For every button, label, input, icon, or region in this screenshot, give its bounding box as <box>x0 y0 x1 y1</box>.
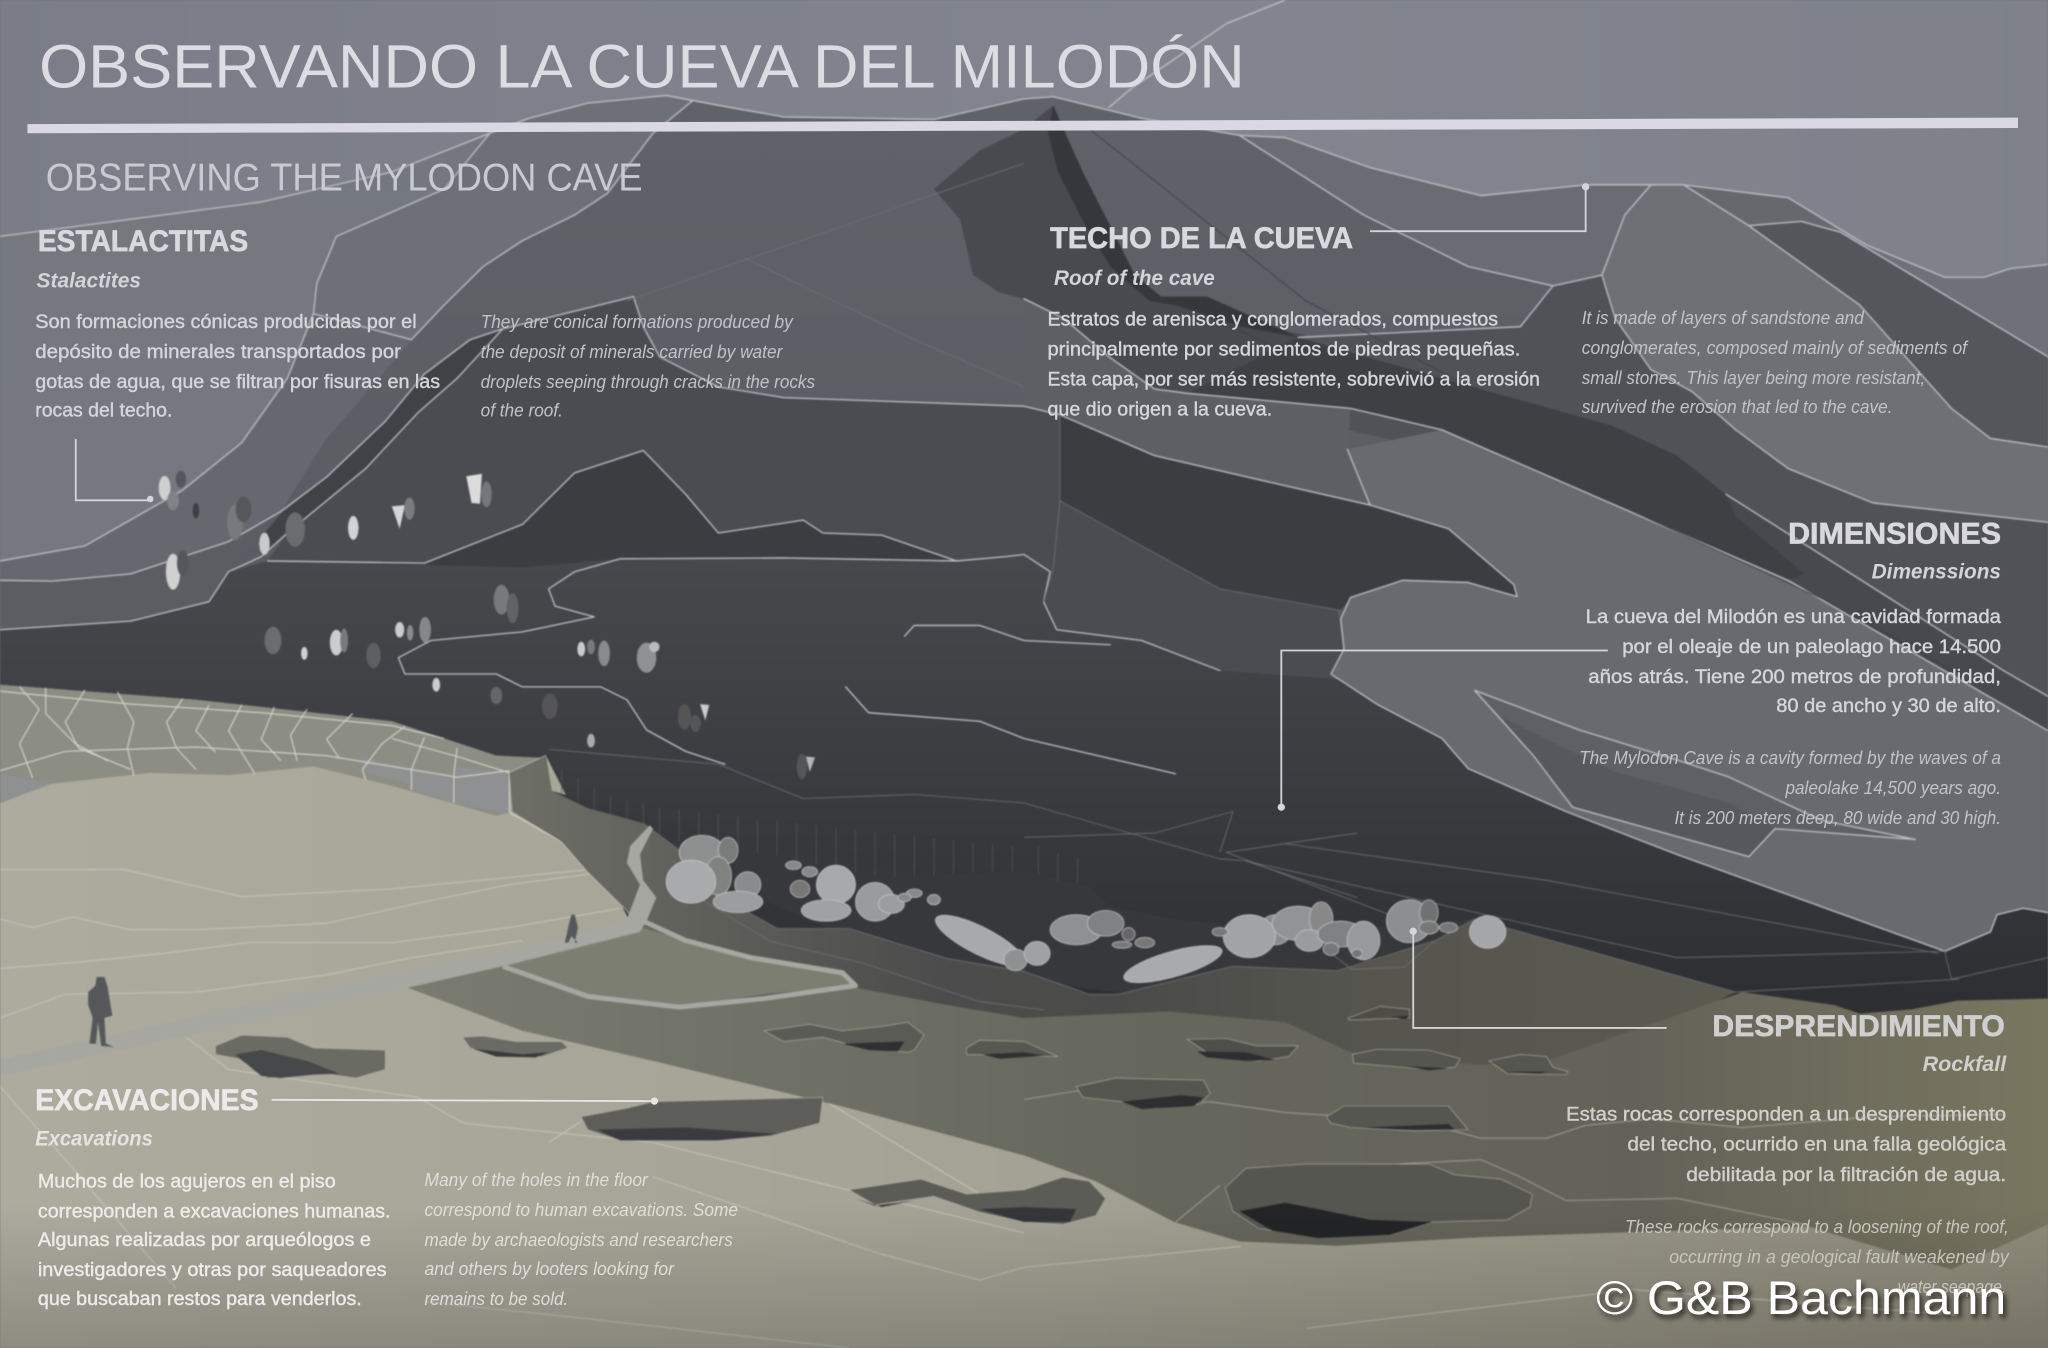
contour lines on olive band <box>1024 1091 2004 1225</box>
subheading: roof: Roof of the cave <box>1054 267 1215 290</box>
body: english: of the roof. <box>481 400 563 421</box>
person: large walker <box>88 977 114 1047</box>
title rule <box>27 118 2018 133</box>
excavation holes <box>216 1006 1568 1238</box>
body: english: paleolake 14,500 years ago. <box>1785 777 2001 798</box>
body: spanish: años atrás. Tiene 200 metros de profundidad, <box>1588 666 2001 688</box>
body: english: remains to be sold. <box>424 1288 568 1309</box>
body: english <box>424 1169 738 1309</box>
panel: techo de la cueva <box>1048 222 1969 420</box>
body: spanish: debilitada por la filtración de agua. <box>1686 1164 2006 1186</box>
light wedge: cave wall <box>1331 430 2048 951</box>
body: english: made by archaeologists and researchers <box>424 1229 733 1250</box>
body: spanish: por el oleaje de un paleolago hace 14.500 <box>1622 636 2001 658</box>
stratum: upper right small <box>1684 185 1840 232</box>
body: spanish: principalmente por sedimentos de piedras pequeñas. <box>1048 338 1520 360</box>
stratum: lane above tongue <box>1024 301 1370 505</box>
stratum: right dark band <box>1749 221 2048 447</box>
callout: stalactites leader <box>76 439 153 502</box>
rock stratum: left upper <box>313 95 692 340</box>
body: english <box>1579 747 2001 828</box>
floor: sand base <box>0 685 2048 1348</box>
body: spanish: Estas rocas corresponden a un desprendimiento <box>1566 1104 2006 1126</box>
panel: excavaciones <box>35 1084 738 1310</box>
body: spanish: Esta capa, por ser más resistente, sobrevivió a la erosión <box>1048 368 1540 390</box>
heading: excavaciones: EXCAVACIONES <box>35 1084 259 1117</box>
body: english <box>481 311 815 421</box>
floor: grey cracked blocks <box>0 757 509 814</box>
body: spanish <box>38 1170 391 1310</box>
rock-layer contour lines <box>643 823 1959 1010</box>
body: english: water seepage. <box>1898 1276 2006 1297</box>
body: spanish: depósito de minerales transportados por <box>35 341 401 363</box>
dark lower tongue <box>1060 415 1517 610</box>
body: spanish: que buscaban restos para venderlos. <box>38 1288 362 1310</box>
body: english: the deposit of minerals carried by water <box>481 341 783 362</box>
floor: lawn inside path loop <box>503 928 856 1007</box>
body: english: droplets seeping through cracks in the rocks <box>481 371 815 392</box>
floor: cracks network <box>0 687 637 928</box>
panel: estalactitas <box>35 225 815 422</box>
body: english: It is 200 meters deep, 80 wide and 30 high. <box>1674 807 2001 828</box>
heading: techo: TECHO DE LA CUEVA <box>1050 222 1353 255</box>
body: english: These rocks correspond to a loosening of the roof, <box>1625 1216 2009 1237</box>
mountain peak dark mass <box>934 105 1306 393</box>
body: english <box>1582 307 1969 417</box>
roof contour lines <box>0 0 2048 979</box>
body: spanish: Estratos de arenisca y conglomerados, compuestos <box>1048 308 1498 330</box>
heading: dimensiones: DIMENSIONES <box>1788 517 2001 550</box>
lower ground shading <box>0 1204 2048 1348</box>
peak dark stripe <box>1048 105 1298 337</box>
stratum: mid-dark roof layer <box>1187 275 2048 774</box>
title: OBSERVANDO LA CUEVA DEL MILODÓN <box>39 33 1245 102</box>
body: english: Many of the holes in the floor <box>424 1169 649 1190</box>
body: spanish <box>1586 606 2001 717</box>
callout: rockfall leader <box>1410 928 1667 1028</box>
subheading: rockfall: Rockfall <box>1923 1053 2007 1076</box>
rock stratum: left lower <box>0 512 281 630</box>
shaded strip beside wedge <box>1726 494 2048 731</box>
subheading: stalactites: Stalactites <box>37 269 141 292</box>
body: english: small stones. This layer being more resistant, <box>1582 367 1925 388</box>
body: spanish <box>1566 1104 2006 1186</box>
rock stratum: left middle <box>0 314 411 581</box>
body: spanish: Algunas realizadas por arqueólogos e <box>38 1229 371 1251</box>
stratum: roof mid layer <box>0 297 1344 731</box>
body: english: It is made of layers of sandstone and <box>1582 307 1865 328</box>
person: small walker <box>565 915 578 943</box>
dark cavern ceiling <box>0 550 2048 1348</box>
body: english: The Mylodon Cave is a cavity formed by the waves of a <box>1579 747 2001 768</box>
photo credit watermark: © G&B Bachmann <box>1596 1271 2006 1324</box>
callout: roof leader <box>1370 183 1589 231</box>
subheading: excavations: Excavations <box>35 1128 153 1151</box>
body: spanish: rocas del techo. <box>35 400 172 422</box>
stratum: upper right peak <box>1602 185 2048 522</box>
body: spanish: del techo, ocurrido en una falla geológica <box>1627 1134 2006 1156</box>
body: spanish: Muchos de los agujeros en el piso <box>38 1170 336 1192</box>
subtitle: OBSERVING THE MYLODON CAVE <box>46 157 643 200</box>
walkway side loop <box>503 921 856 1007</box>
body: spanish: La cueva del Milodón es una cavidad formada <box>1586 606 2001 628</box>
walkway <box>0 825 656 1076</box>
body: spanish: Son formaciones cónicas producidas por el <box>35 311 417 333</box>
body: spanish: corresponden a excavaciones humanas. <box>38 1200 391 1222</box>
body: english: They are conical formations produced by <box>481 311 795 332</box>
rocks: rockfall boulders <box>666 835 1506 990</box>
stratum: far right <box>1788 198 2048 357</box>
callout: excavations leader <box>272 1097 658 1105</box>
body: spanish: investigadores y otras por saqueadores <box>38 1259 387 1281</box>
body: spanish: 80 de ancho y 30 de alto. <box>1776 695 2001 717</box>
body: spanish <box>1048 308 1540 420</box>
subheading: dimensions: Dimenssions <box>1872 561 2001 584</box>
floor: contour lines on sand <box>0 870 1959 1348</box>
floor: cracked olive band <box>0 685 546 816</box>
floor: dark strata below ceiling <box>546 756 1736 1032</box>
stratum right of peak <box>1240 135 1651 286</box>
dark hill in ceiling <box>268 450 957 567</box>
dark tongue of sandstone <box>1187 337 1804 584</box>
heading: desprendimiento: DESPRENDIMIENTO <box>1712 1010 2005 1043</box>
body: english: and others by looters looking for <box>424 1258 675 1279</box>
dark diagonal band <box>261 329 503 557</box>
body: spanish: que dio origen a la cueva. <box>1048 398 1272 420</box>
body: english: occurring in a geological fault weakened by <box>1669 1246 2011 1267</box>
body: english: correspond to human excavations. Some <box>424 1199 738 1220</box>
panel: dimensiones <box>1579 517 2001 828</box>
body: spanish: gotas de agua, que se filtran por fisuras en las <box>35 371 440 393</box>
wedge inner stratum <box>1475 690 1915 857</box>
strata hatching <box>562 769 1078 883</box>
floor: olive band with excavations <box>408 966 2048 1269</box>
callout: cavity leader <box>1278 650 1608 811</box>
body: english: conglomerates, composed mainly of sediments of <box>1582 337 1969 358</box>
floor: grey-olive slope with hill <box>408 756 1736 1075</box>
body: spanish <box>35 311 440 422</box>
body: english <box>1625 1216 2011 1297</box>
heading: estalactitas: ESTALACTITAS <box>38 225 248 258</box>
stalactites <box>159 471 815 779</box>
wedge inner lower stratum <box>1501 717 1775 857</box>
body: english: survived the erosion that led to the cave. <box>1582 396 1893 417</box>
panel: desprendimiento <box>1566 1010 2011 1297</box>
